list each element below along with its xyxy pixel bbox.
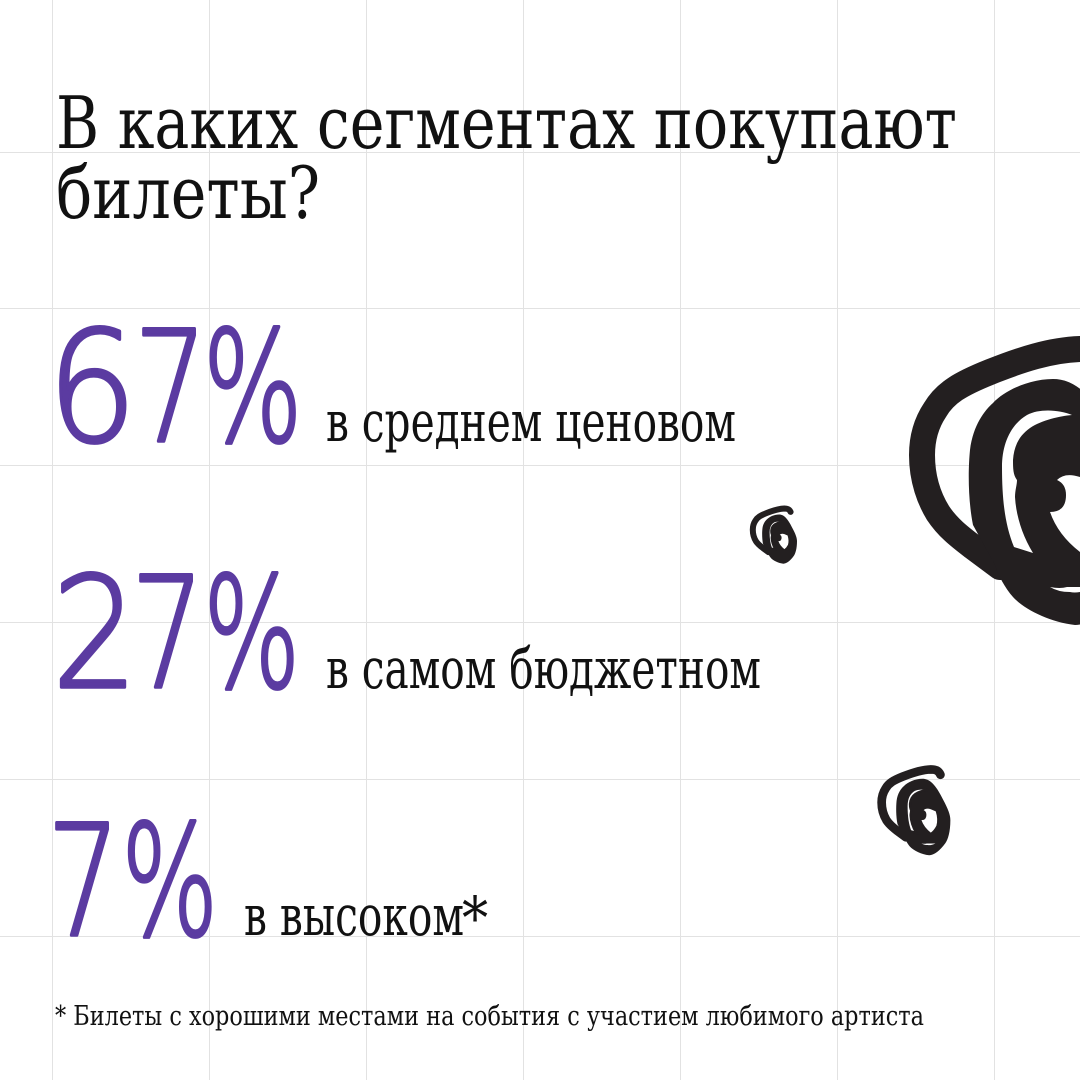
- stat: 67% in mid-price segment: 6: [47, 298, 137, 477]
- icon: small scribble middle: [753, 508, 797, 564]
- footnote: * Билеты с хорошими местами на события с участием любимого артиста: [55, 1001, 924, 1032]
- stat: 67% in mid-price segment: 7: [134, 300, 207, 478]
- stat: 7% in high segment: 7: [47, 794, 120, 972]
- icon: small scribble lower: [882, 769, 950, 855]
- stat: 27% in budget segment: [52, 544, 761, 724]
- stat: 7% in high segment: %: [122, 792, 218, 972]
- stat: 27% in budget segment: 2: [52, 545, 138, 724]
- icon: large scribble: [922, 349, 1080, 625]
- stat: 7% in high segment: в высоком: [244, 884, 464, 949]
- stat: 27% in budget segment: 7: [131, 546, 204, 724]
- stat: 67% in mid-price segment: %: [203, 299, 303, 478]
- stat: 67% in mid-price segment: в среднем ценовом: [326, 390, 736, 455]
- title: билеты?: [56, 151, 320, 235]
- title: [56, 81, 957, 235]
- stat: 27% in budget segment: %: [204, 544, 300, 724]
- stat: 27% in budget segment: в самом бюджетном: [326, 637, 761, 702]
- stat: 7% in high segment: [47, 792, 488, 972]
- stat: 7% in high segment: *: [462, 885, 488, 953]
- stat: 67% in mid-price segment: [47, 298, 736, 478]
